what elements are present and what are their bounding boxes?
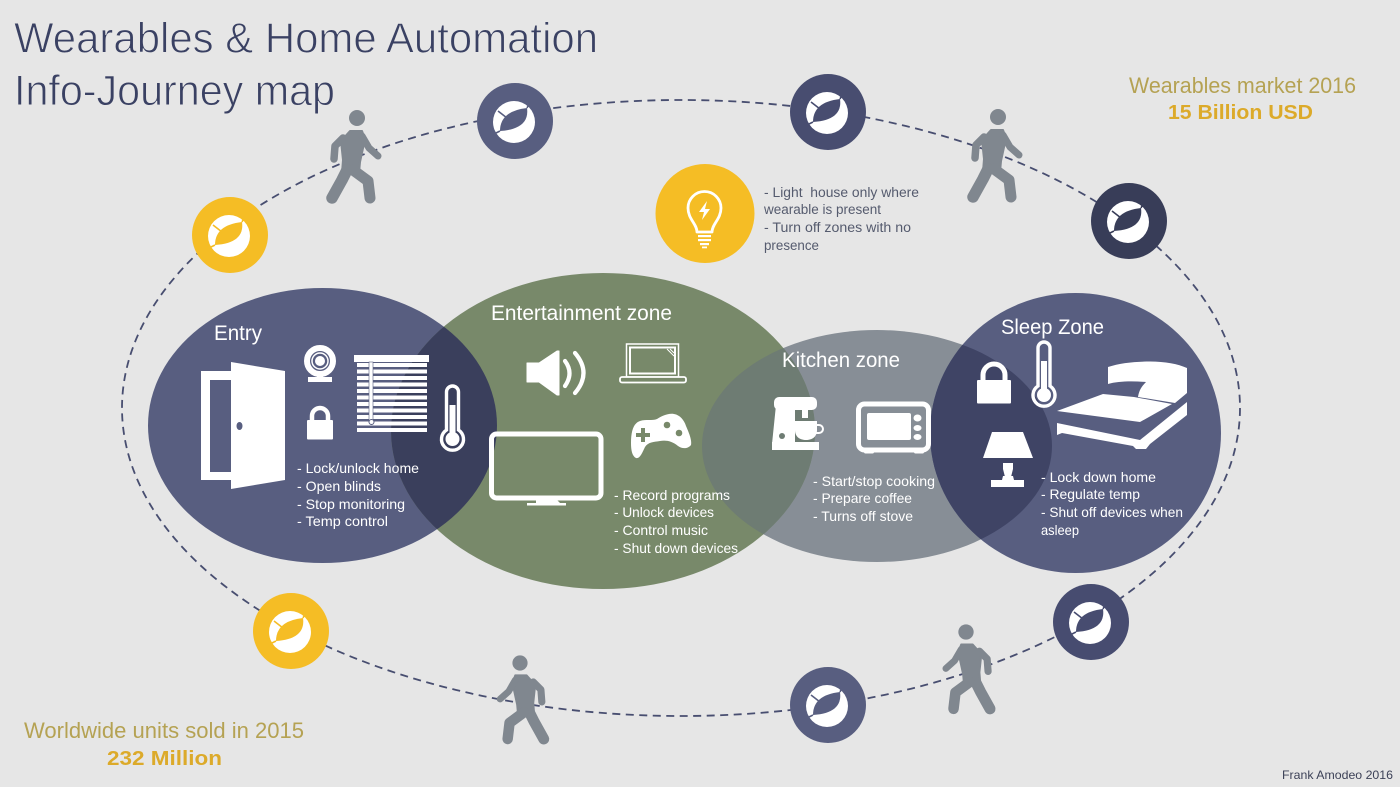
icon: television: [492, 434, 601, 506]
credit: Frank Amodeo 2016: [1282, 768, 1393, 782]
icon: wearable node 6: [790, 667, 866, 743]
icon: game controller: [631, 414, 691, 458]
list: entertainment actions: - Shut down devices: [614, 540, 738, 556]
stat: wearables market: 15 Billion USD: [1168, 102, 1313, 124]
icon: walking person 4: [500, 655, 544, 739]
list: sleep actions: - Lock down home: [1041, 469, 1156, 485]
list: kitchen actions: - Turns off stove: [813, 508, 913, 524]
icon: blinds: [354, 355, 429, 432]
dashed journey path: [122, 100, 1240, 716]
icon: wearable node 2: [477, 83, 553, 159]
panel: entertainment zone: [491, 302, 738, 556]
icon: wearable node 7: [253, 593, 329, 669]
icon: microwave: [858, 404, 928, 454]
icon: wearable node 1: [192, 197, 268, 273]
heading: sleep zone: Sleep Zone: [1001, 316, 1104, 339]
icon: light bulb: [656, 164, 754, 263]
panel: sleep zone: [977, 316, 1187, 538]
callout: smart lighting: [656, 164, 919, 263]
list: entertainment actions: - Record programs: [614, 487, 730, 503]
icon: wearable node 3: [790, 74, 866, 150]
title: Wearables & Home Automation: [14, 14, 598, 62]
icon: speaker: [527, 351, 584, 395]
list: kitchen actions: [813, 473, 935, 524]
icon: walking person 3: [946, 624, 990, 709]
panel: kitchen zone: [772, 349, 935, 524]
icon: wearable node 5: [1053, 584, 1129, 660]
icon: padlock: [307, 408, 333, 440]
text: lighting notes: - Turn off zones with no: [764, 220, 911, 235]
icon: coffee maker: [772, 397, 823, 450]
icon: lamp: [983, 432, 1033, 487]
stat: wearables market: Wearables market 2016: [1129, 73, 1356, 98]
panel: entry: [201, 322, 464, 529]
text: lighting notes: presence: [764, 238, 819, 253]
list: entry actions: - Lock/unlock home: [297, 460, 419, 476]
icon: walking person 1: [332, 110, 378, 198]
list: entry actions: - Stop monitoring: [297, 496, 405, 512]
stat: wearables market: [1129, 73, 1356, 124]
heading: entry: Entry: [214, 322, 262, 345]
list: entertainment actions: - Control music: [614, 522, 708, 538]
zone shapes: [148, 273, 1221, 589]
title: Info-Journey map: [14, 67, 335, 115]
title: [14, 14, 598, 115]
icon: thermometer: [442, 386, 464, 450]
list: entry actions: [297, 460, 419, 529]
list: sleep actions: asleep: [1041, 522, 1079, 538]
list: kitchen actions: - Prepare coffee: [813, 490, 912, 506]
list: entry actions: - Open blinds: [297, 478, 381, 494]
stat: worldwide units: Worldwide units sold in 2015: [24, 718, 304, 743]
list: sleep actions: [1041, 469, 1183, 538]
text: lighting notes: wearable is present: [763, 202, 881, 217]
icon: laptop: [620, 344, 686, 382]
text: lighting notes: [763, 185, 919, 253]
icon: door: [201, 362, 285, 489]
icon: padlock: [977, 364, 1011, 404]
list: sleep actions: - Shut off devices when: [1041, 504, 1183, 520]
stat: worldwide units: [24, 718, 304, 770]
icon: wearable node 4: [1091, 183, 1167, 259]
list: entry actions: - Temp control: [297, 513, 388, 529]
heading: kitchen zone: Kitchen zone: [782, 349, 900, 372]
icon: thermometer: [1033, 342, 1055, 406]
icon: webcam: [307, 348, 333, 382]
list: sleep actions: - Regulate temp: [1041, 486, 1140, 502]
list: entertainment actions: [614, 487, 738, 556]
icon: bed: [1057, 362, 1187, 449]
icon: walking person 2: [973, 109, 1019, 197]
heading: entertainment zone: Entertainment zone: [491, 302, 672, 325]
list: kitchen actions: - Start/stop cooking: [813, 473, 935, 489]
text: lighting notes: - Light house only where: [764, 185, 919, 200]
stat: worldwide units: 232 Million: [107, 748, 222, 770]
list: entertainment actions: - Unlock devices: [614, 504, 714, 520]
